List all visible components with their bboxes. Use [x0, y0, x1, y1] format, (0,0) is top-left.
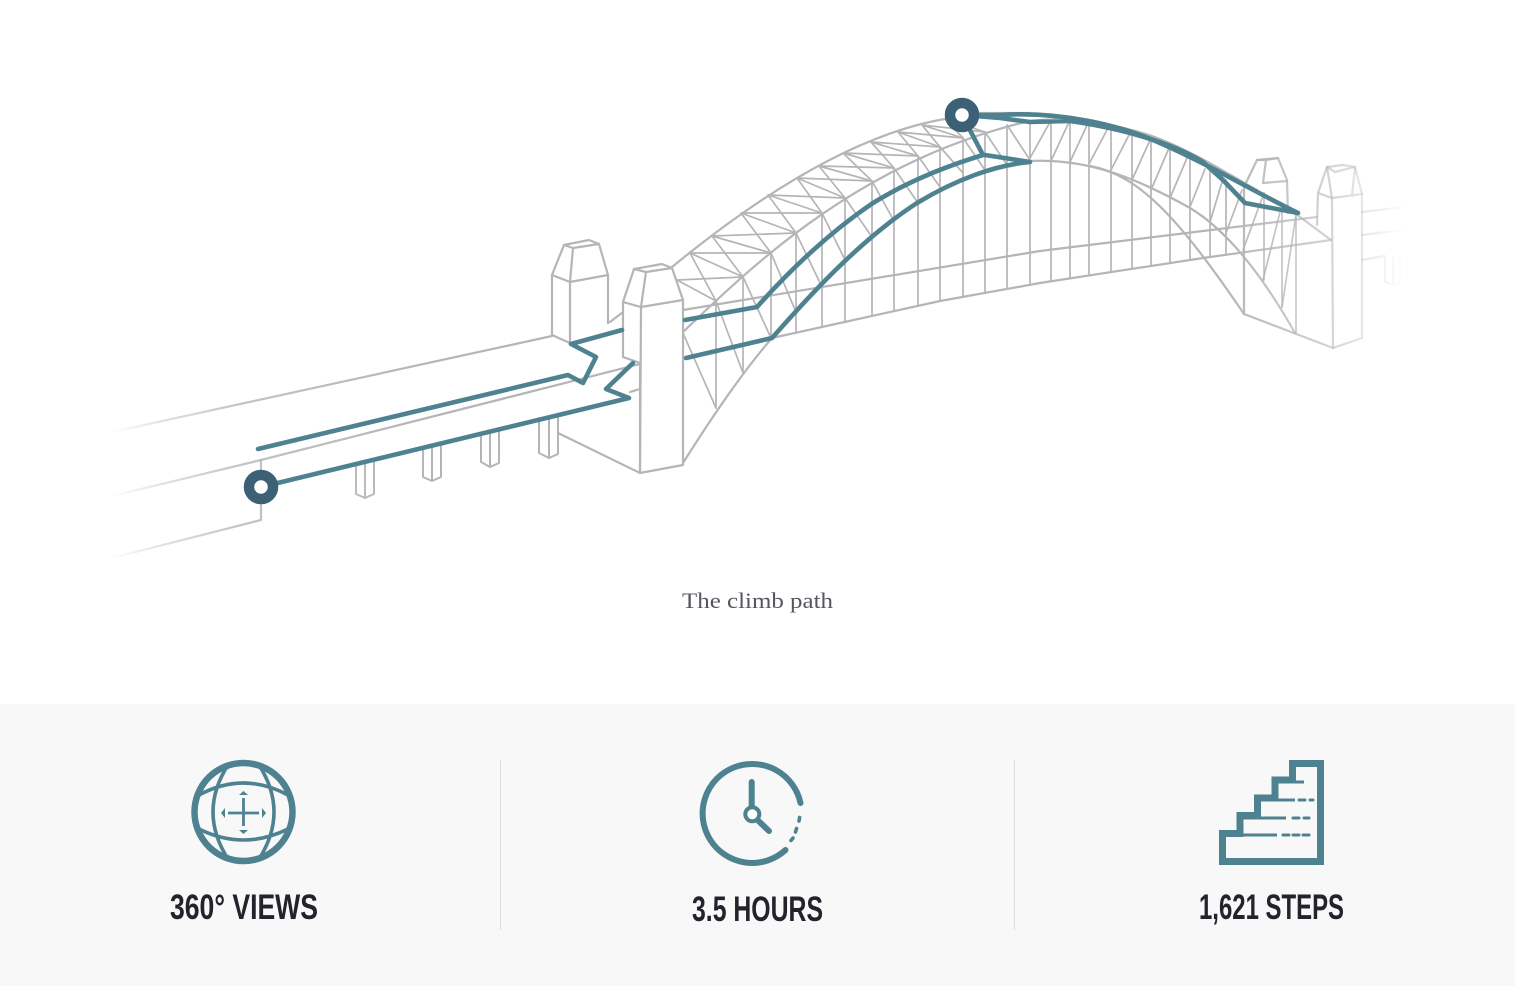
- icon: clock: [703, 764, 800, 863]
- approach piers: [356, 415, 558, 498]
- arch truss web: [677, 119, 985, 301]
- icon: stairs: [1222, 764, 1320, 862]
- stat: steps: [1199, 764, 1344, 927]
- climb path: [258, 114, 1298, 487]
- path: descent: [258, 330, 622, 449]
- far right pylon: [1244, 158, 1333, 348]
- arch lower chord: [683, 161, 1295, 463]
- icon: globe: [194, 763, 292, 861]
- stat: views: [170, 763, 318, 927]
- near right pylon: [1317, 165, 1362, 348]
- label: 360 views: 360° VIEWS: [170, 888, 318, 927]
- near left pylon: [623, 264, 683, 473]
- marker: summit: [950, 103, 974, 127]
- hangers left half: [683, 121, 1030, 408]
- path: ascent on arch: [686, 155, 1030, 358]
- main deck: [610, 214, 1331, 338]
- path: over the summit: [962, 114, 1298, 213]
- stat: hours: [692, 764, 823, 929]
- arch truss upper chords: [672, 113, 1257, 332]
- caption: The climb path: [682, 588, 833, 613]
- bridge illustration: [112, 113, 1403, 558]
- right approach stubs: [1362, 207, 1403, 285]
- left approach roadway: [112, 336, 640, 558]
- far left pylon: [552, 240, 608, 343]
- label: 1,621 steps: 1,621 STEPS: [1199, 888, 1344, 927]
- path: descent on arch: [685, 115, 983, 320]
- hangers right half: [1030, 122, 1296, 333]
- panel background: [0, 704, 1515, 986]
- path: ascent: [261, 363, 633, 487]
- label: 3.5 hours: 3.5 HOURS: [692, 890, 823, 929]
- marker: start: [249, 475, 273, 499]
- panel: stats: [0, 704, 1515, 986]
